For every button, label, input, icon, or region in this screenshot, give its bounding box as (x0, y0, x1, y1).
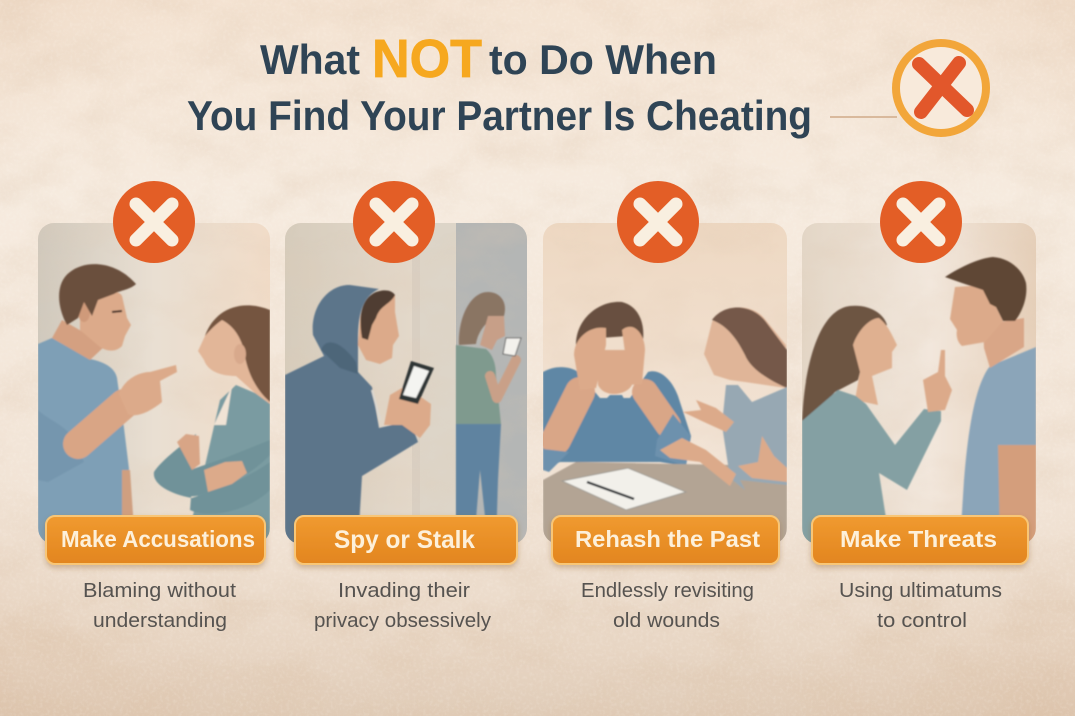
panel: make threats (802, 223, 1036, 544)
description: spy or stalk: Invading their (338, 580, 470, 602)
description: make threats: Using ultimatums (839, 580, 1002, 602)
label: rehash the past (552, 516, 779, 564)
icon: x badge 2 (353, 181, 435, 263)
description: spy or stalk (314, 580, 491, 632)
icon: x badge 4 (880, 181, 962, 263)
title (187, 29, 812, 139)
description: rehash the past: old wounds (613, 610, 720, 632)
panel backdrop (543, 223, 787, 544)
description: rehash the past (581, 580, 754, 632)
icon: title X mark with connector line (830, 43, 986, 133)
icon: x badge 1 (113, 181, 195, 263)
description: make accusations (83, 580, 236, 632)
label: spy or stalk (295, 516, 517, 564)
label: make accusations (46, 516, 265, 564)
label: make threats (812, 516, 1028, 564)
description: rehash the past: Endlessly revisiting (581, 580, 754, 602)
illustration: man head in hands, woman arguing at table (543, 300, 787, 542)
illustration: woman raising finger at man (802, 256, 1036, 542)
description: make accusations: Blaming without (83, 580, 236, 602)
description: make threats: to control (877, 610, 967, 632)
panel: spy or stalk (285, 223, 527, 544)
title line 1 continued: to Do When (489, 36, 717, 83)
description: make threats (839, 580, 1002, 632)
panel backdrop (802, 223, 1036, 544)
panel backdrop (38, 223, 270, 544)
title line 2: You Find Your Partner Is Cheating (187, 92, 812, 139)
title line 1: What (260, 36, 360, 83)
illustration: man pointing at woman (38, 263, 270, 542)
label: make accusations: Make Accusations (61, 526, 255, 552)
description: make accusations: understanding (93, 610, 227, 632)
illustration: hooded man watching partner with phone (285, 223, 527, 544)
icon: x badge 3 (617, 181, 699, 263)
description: spy or stalk: privacy obsessively (314, 610, 491, 632)
emphasised word NOT: NOT (372, 29, 482, 89)
panel: rehash the past (543, 223, 787, 544)
label: spy or stalk: Spy or Stalk (334, 526, 475, 554)
label: rehash the past: Rehash the Past (575, 526, 760, 552)
panel: make accusations (38, 223, 270, 544)
panel backdrop (285, 223, 527, 544)
label: make threats: Make Threats (840, 526, 997, 552)
